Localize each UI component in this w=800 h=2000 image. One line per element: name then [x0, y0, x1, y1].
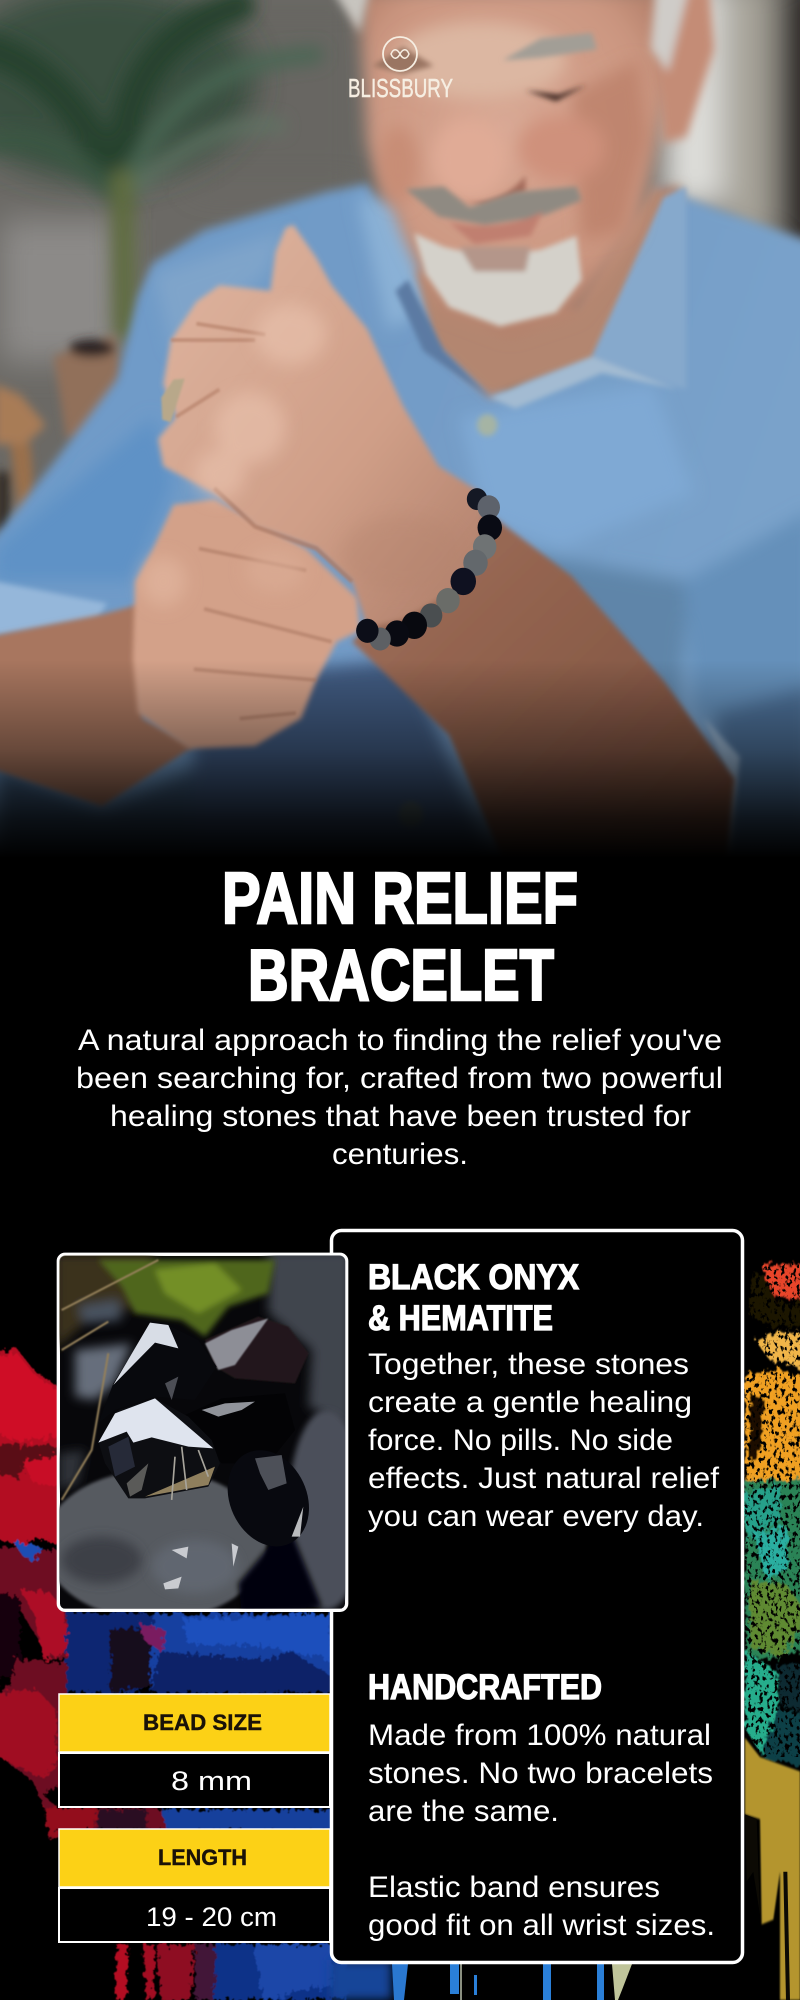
subtitle: centuries. — [332, 1138, 468, 1171]
spec: length: LENGTH — [158, 1845, 247, 1870]
dark oval stone — [228, 1450, 309, 1546]
brand logo — [348, 37, 453, 103]
subtitle — [76, 1024, 723, 1171]
lower fist — [133, 499, 360, 749]
text: handcrafted description: Made from 100% natural — [368, 1719, 711, 1752]
text: stones description: effects. Just natural relief — [368, 1462, 720, 1495]
right forearm — [352, 510, 735, 878]
beard and smile — [406, 186, 582, 326]
bottom drips under panel — [330, 1960, 632, 2000]
right gray stone — [290, 1410, 346, 1609]
text: stones description: you can wear every day. — [368, 1500, 704, 1533]
title: BRACELET — [248, 936, 554, 1016]
spec: bead size: 8 mm — [171, 1766, 252, 1796]
brand logo: BLISSBURY — [348, 73, 453, 103]
neck — [416, 186, 684, 398]
top black stone — [108, 1358, 217, 1397]
stones photo — [56, 1252, 348, 1612]
big gray stone — [59, 1474, 268, 1609]
shirt collar — [0, 186, 740, 860]
plant pot and stool — [0, 335, 122, 532]
glossy black stone — [182, 1393, 295, 1463]
subtitle: A natural approach to finding the relief you've — [78, 1024, 722, 1057]
subtitle: been searching for, crafted from two powerful — [76, 1062, 723, 1095]
face — [350, 0, 662, 312]
shirt — [0, 184, 800, 878]
wedding ring — [161, 378, 185, 422]
spec: bead size: BEAD SIZE — [143, 1710, 262, 1735]
panel: product details — [332, 1230, 742, 1962]
heading: handcrafted: HANDCRAFTED — [368, 1668, 602, 1707]
text: handcrafted description: Elastic band ensures — [368, 1871, 660, 1904]
spec: bead size — [59, 1694, 330, 1807]
front faceted stone — [112, 1415, 218, 1498]
text: stones description — [368, 1348, 720, 1533]
subtitle: healing stones that have been trusted for — [110, 1100, 691, 1133]
spec: length — [59, 1829, 330, 1942]
reddish stone — [205, 1317, 308, 1383]
text: handcrafted description: good fit on all wrist sizes. — [368, 1909, 715, 1942]
text: stones description: force. No pills. No side — [368, 1424, 673, 1457]
text: handcrafted description: stones. No two bracelets — [368, 1757, 713, 1790]
heading: black onyx and hematite: BLACK ONYX — [368, 1258, 580, 1297]
heading: black onyx and hematite — [368, 1258, 580, 1338]
title: PAIN RELIEF — [222, 859, 578, 939]
upper hand — [158, 225, 482, 628]
text: handcrafted description — [368, 1719, 715, 1942]
spec: length: 19 - 20 cm — [146, 1902, 277, 1932]
title — [222, 859, 578, 1016]
left paint splash — [0, 1348, 347, 2000]
spec table — [59, 1694, 330, 1942]
moss — [98, 1260, 275, 1337]
hero photo: man holding wrist wearing bracelet — [0, 0, 800, 878]
text: handcrafted description: are the same. — [368, 1795, 559, 1828]
photo bottom fade — [0, 660, 800, 858]
text: stones description: create a gentle healing — [368, 1386, 692, 1419]
text: stones description: Together, these stones — [368, 1348, 689, 1381]
right paint splash — [745, 1260, 800, 2000]
heading: black onyx and hematite: & HEMATITE — [368, 1299, 553, 1338]
bracelet beads — [356, 488, 502, 651]
left forearm — [0, 603, 194, 806]
